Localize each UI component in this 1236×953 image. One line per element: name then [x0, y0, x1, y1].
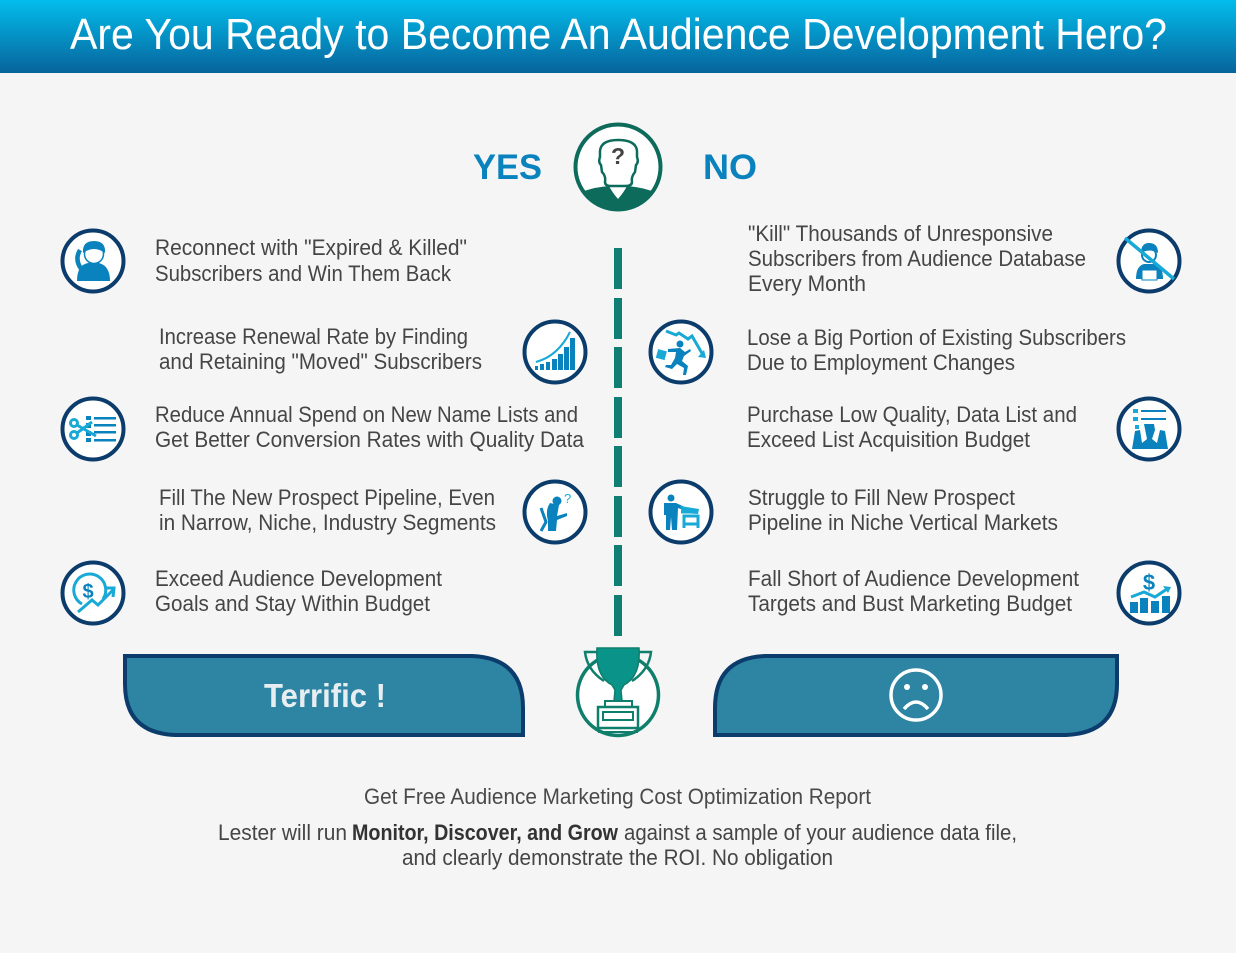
- no item 2 text: Lose a Big Portion of Existing Subscribers: [747, 325, 1126, 350]
- yes item 2 text: and Retaining "Moved" Subscribers: [159, 349, 482, 374]
- icon: person on phone: [62, 230, 124, 292]
- yes item 5 text: [155, 566, 442, 616]
- panel: terrific outcome: [125, 656, 523, 735]
- yes item 1 text: Subscribers and Win Them Back: [155, 261, 452, 286]
- icon: person thinking at desk: [524, 482, 586, 542]
- call to action body: Monitor, Discover, and Grow: [352, 820, 619, 845]
- no item 3 text: Exceed List Acquisition Budget: [747, 427, 1030, 452]
- yes item 3 text: [155, 402, 585, 452]
- yes label: YES: [473, 148, 542, 187]
- icon: dollar over bar chart: [1118, 562, 1180, 624]
- icon: person thinking at desk: ?: [564, 491, 571, 506]
- icon: running man with falling arrow: [650, 322, 712, 382]
- no item 5 text: Targets and Bust Marketing Budget: [748, 591, 1072, 616]
- icon: scissors cutting list: [62, 398, 124, 460]
- no item 1 text: [748, 221, 1086, 296]
- no item 1 text: "Kill" Thousands of Unresponsive: [748, 221, 1053, 246]
- call to action body: against a sample of your audience data file,: [624, 820, 1017, 845]
- call to action heading: Get Free Audience Marketing Cost Optimization Report: [364, 784, 871, 809]
- no item 2 text: [747, 325, 1126, 375]
- no item 4 text: Struggle to Fill New Prospect: [748, 485, 1015, 510]
- yes item 4 text: in Narrow, Niche, Industry Segments: [159, 510, 496, 535]
- icon: trophy: [578, 648, 658, 736]
- no item 3 text: Purchase Low Quality, Data List and: [747, 402, 1077, 427]
- yes item 5 text: Goals and Stay Within Budget: [155, 591, 430, 616]
- yes item 5 text: Exceed Audience Development: [155, 566, 442, 591]
- no item 3 text: [747, 402, 1077, 452]
- panel: sad outcome: [715, 656, 1117, 735]
- icon: dollar with rising arrow: [62, 562, 124, 624]
- panel: terrific outcome: Terrific !: [264, 677, 386, 714]
- no item 1 text: Subscribers from Audience Database: [748, 246, 1086, 271]
- no item 5 text: [748, 566, 1079, 616]
- header banner: [0, 0, 1236, 73]
- call to action body: [218, 820, 1017, 870]
- center dashed divider: [614, 248, 622, 636]
- title: Are You Ready to Become An Audience Development Hero?: [70, 10, 1167, 59]
- yes item 1 text: [155, 235, 467, 286]
- no item 1 text: Every Month: [748, 271, 866, 296]
- yes item 4 text: Fill The New Prospect Pipeline, Even: [159, 485, 495, 510]
- yes item 2 text: [159, 324, 482, 374]
- icon: crossed-out operator: [1118, 230, 1180, 292]
- icon: growth bars: [524, 322, 586, 382]
- no item 5 text: Fall Short of Audience Development: [748, 566, 1079, 591]
- icon: dollar with rising arrow: $: [82, 581, 94, 603]
- icon: person with barrier: [650, 482, 712, 542]
- icon: hands on head with list: [1118, 398, 1180, 460]
- no label: NO: [703, 148, 757, 187]
- no item 4 text: [748, 485, 1058, 535]
- icon: person with question mark: ?: [611, 143, 625, 169]
- yes item 3 text: Get Better Conversion Rates with Quality Data: [155, 427, 585, 452]
- icon: person with question mark: [576, 124, 660, 210]
- yes item 4 text: [159, 485, 496, 535]
- call to action body: and clearly demonstrate the ROI. No obligation: [402, 845, 833, 870]
- no item 2 text: Due to Employment Changes: [747, 350, 1015, 375]
- icon: dollar over bar chart: $: [1143, 570, 1155, 595]
- yes item 2 text: Increase Renewal Rate by Finding: [159, 324, 468, 349]
- yes item 3 text: Reduce Annual Spend on New Name Lists and: [155, 402, 578, 427]
- no item 4 text: Pipeline in Niche Vertical Markets: [748, 510, 1058, 535]
- yes item 1 text: Reconnect with "Expired & Killed": [155, 235, 467, 260]
- icon: sad face: [891, 670, 941, 720]
- call to action body: Lester will run: [218, 820, 347, 845]
